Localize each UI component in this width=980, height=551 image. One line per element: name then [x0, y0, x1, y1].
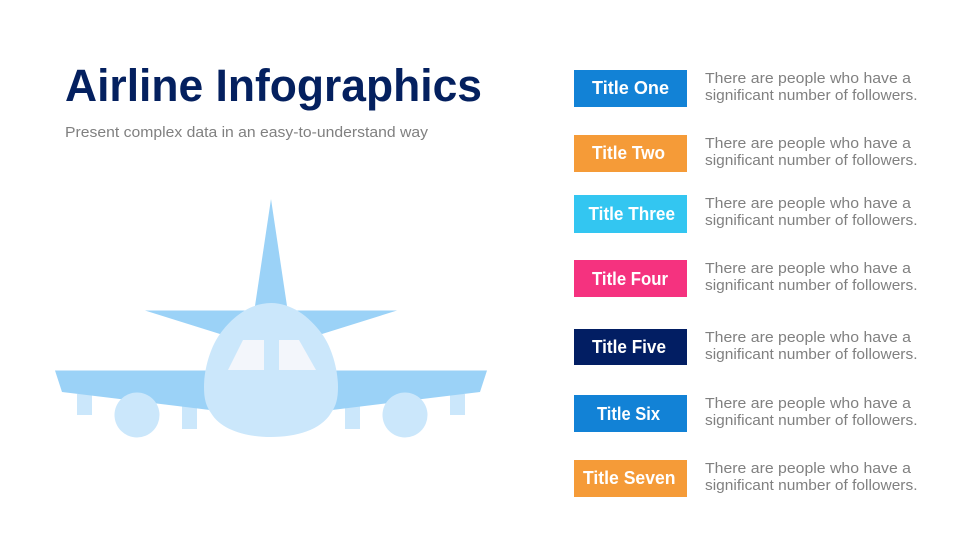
row 6: Title Six: Title Six [597, 404, 660, 424]
row 1: Title One: Title One [592, 78, 669, 98]
row 7: Title Seven: There are people who have a [705, 460, 912, 477]
row 2: Title Two [574, 135, 918, 172]
horizontal stabilizers [145, 310, 397, 334]
cockpit windows [228, 340, 316, 370]
row 1: Title One: significant number of followers. [705, 87, 918, 104]
title: Airline Infographics [65, 60, 482, 111]
pylons under wings [77, 394, 465, 429]
row 4: Title Four: significant number of followers. [705, 277, 918, 294]
row 4: Title Four: Title Four [592, 269, 668, 289]
row 4: Title Four: There are people who have a [705, 260, 912, 277]
subtitle: Present complex data in an easy-to-understand way [65, 124, 429, 141]
row 3: Title Three: Title Three [588, 204, 675, 224]
row 2: Title Two: significant number of followers. [705, 152, 918, 169]
row 7: Title Seven: significant number of followers. [705, 477, 918, 494]
illustration: airplane front view [55, 199, 487, 438]
row 3: Title Three: There are people who have a [705, 195, 912, 212]
tail fin [255, 199, 287, 306]
row 5: Title Five: Title Five [592, 337, 666, 357]
row 6: Title Six: There are people who have a [705, 395, 912, 412]
engines [114, 392, 428, 438]
row 2: Title Two: Title Two [592, 143, 665, 163]
row 5: Title Five: There are people who have a [705, 329, 912, 346]
fuselage [204, 303, 338, 437]
row 1: Title One: There are people who have a [705, 70, 912, 87]
row 7: Title Seven [574, 460, 918, 497]
row 2: Title Two: There are people who have a [705, 135, 912, 152]
row 5: Title Five [574, 329, 918, 365]
row 4: Title Four [574, 260, 918, 297]
row 3: Title Three [574, 195, 918, 233]
row 1: Title One [574, 70, 918, 107]
row 6: Title Six: significant number of followers. [705, 412, 918, 429]
wings [55, 370, 487, 410]
row 6: Title Six [574, 395, 918, 432]
row 3: Title Three: significant number of followers. [705, 212, 918, 229]
row 5: Title Five: significant number of followers. [705, 346, 918, 363]
row 7: Title Seven: Title Seven [583, 468, 676, 488]
